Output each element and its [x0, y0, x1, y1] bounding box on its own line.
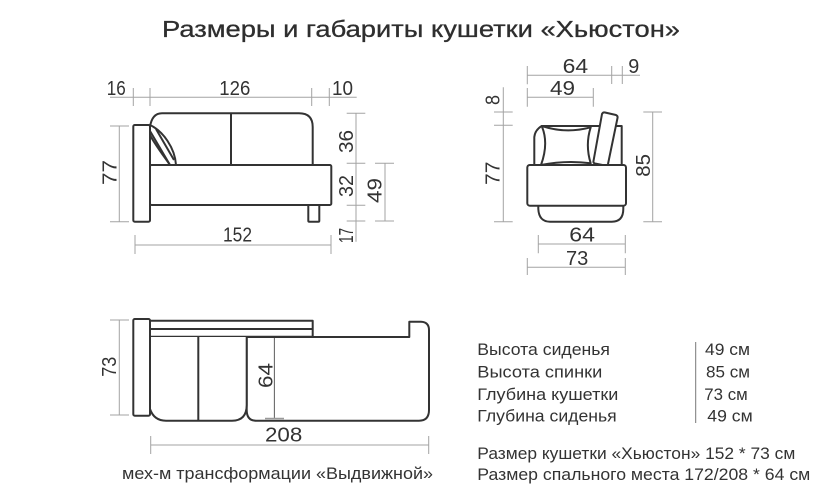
front view dimension labels	[100, 78, 387, 247]
dimension lines: front view	[110, 88, 394, 254]
row: depth	[477, 385, 748, 404]
row: depth: Глубина кушетки	[477, 385, 618, 404]
side view dimension labels: 77	[482, 162, 504, 185]
sofa back	[150, 113, 313, 165]
side view dimension labels: 49	[550, 78, 575, 100]
tilted pillow	[593, 112, 618, 166]
front view drawing	[110, 88, 394, 254]
dimension lines: unfolded view	[110, 320, 429, 454]
back divider	[230, 113, 232, 165]
front view dimension labels: 126	[219, 78, 250, 100]
folded back	[150, 321, 313, 337]
side view dimension labels: 73	[566, 248, 588, 270]
leg	[308, 205, 319, 222]
sleeping size text: Размер спального места 172/208 * 64 см	[477, 465, 810, 484]
lower base	[538, 206, 623, 222]
row: seat depth: Глубина сиденья	[477, 407, 617, 426]
unfolded view dimension labels	[99, 357, 302, 447]
seat section	[150, 337, 247, 421]
row: back height	[477, 363, 750, 382]
side view dimension labels: 64	[569, 225, 595, 247]
front view dimension labels: 152	[223, 225, 252, 247]
side view dimension labels: 8	[482, 95, 504, 105]
unfolded view drawing	[110, 319, 429, 454]
side view dimension labels: 64	[563, 56, 588, 78]
row: seat depth	[477, 407, 753, 426]
pillow	[150, 125, 176, 165]
front view dimension labels: 17	[336, 228, 358, 243]
inner dimension: 64	[273, 337, 275, 419]
row: seat depth: 49 см	[707, 407, 753, 426]
unfolded view dimension labels: 73	[99, 357, 121, 377]
unfolded view dimension labels: 208	[265, 425, 302, 447]
row: seat height	[477, 340, 750, 359]
armrest	[133, 319, 150, 416]
side view dimension labels: 9	[628, 56, 639, 78]
backrest	[534, 126, 622, 165]
front view dimension labels: 10	[332, 78, 353, 100]
title: Размеры и габариты кушетки «Хьюстон»	[162, 16, 680, 42]
seat divider	[197, 337, 199, 421]
row: back height: Высота спинки	[477, 363, 602, 382]
side view drawing	[494, 66, 662, 275]
seat	[150, 165, 331, 205]
table divider	[695, 342, 697, 423]
row: seat height: Высота сиденья	[477, 340, 610, 359]
side view dimension labels: 85	[633, 154, 655, 177]
sleeping section	[247, 322, 429, 421]
unfolded view dimension labels: 64	[256, 363, 278, 388]
armrest	[133, 125, 150, 222]
overall size text: Размер кушетки «Хьюстон» 152 * 73 см	[477, 444, 795, 463]
dimension lines: side view	[494, 66, 662, 275]
seat block	[527, 165, 626, 206]
front view dimension labels: 49	[365, 178, 387, 203]
row: seat height: 49 см	[705, 340, 750, 359]
cushion	[541, 126, 591, 165]
specifications table	[477, 340, 753, 426]
side view dimension labels	[482, 56, 655, 270]
front view dimension labels: 16	[107, 78, 126, 100]
front view dimension labels: 32	[336, 175, 358, 197]
front view dimension labels: 36	[336, 130, 358, 153]
mechanism caption: мех-м трансформации «Выдвижной»	[122, 464, 433, 483]
front view dimension labels: 77	[100, 160, 122, 185]
row: depth: 73 см	[704, 385, 748, 404]
row: back height: 85 см	[706, 363, 750, 382]
